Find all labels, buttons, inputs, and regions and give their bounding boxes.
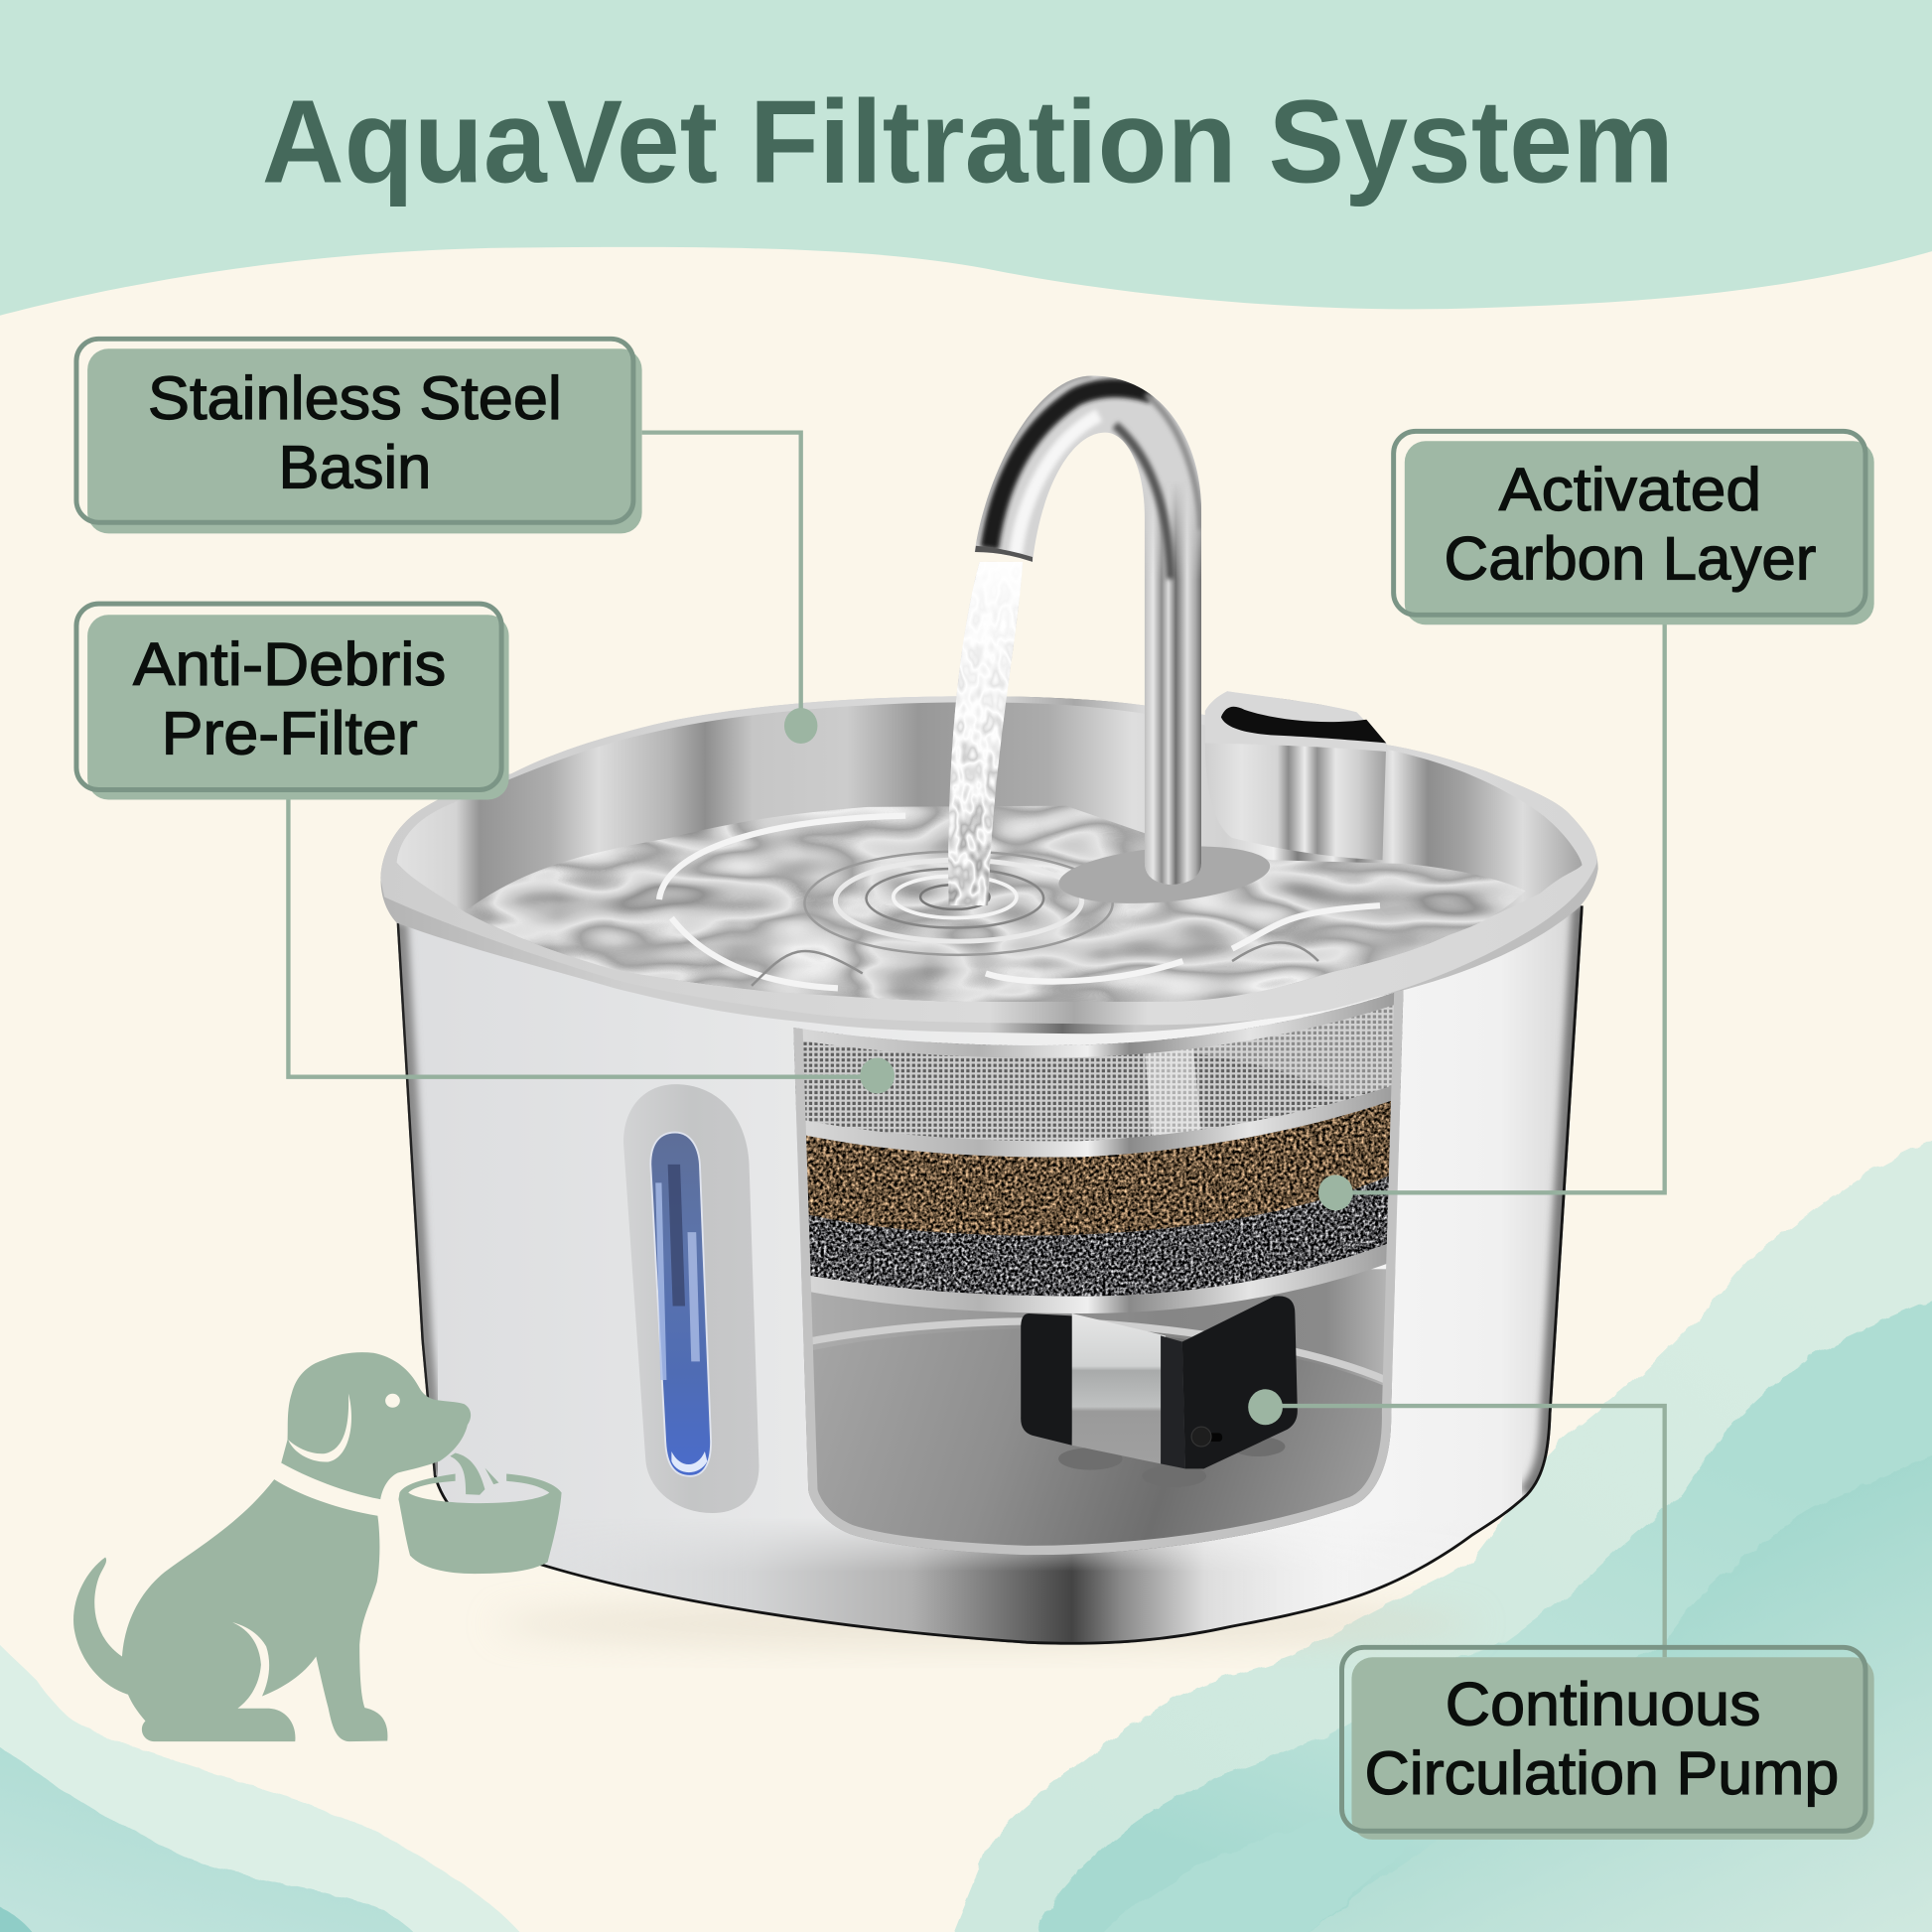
label: Continuous Circulation Pump: Continuous	[1446, 1671, 1760, 1738]
bottom-right watercolor wash	[949, 1134, 1932, 1932]
rim and top surface	[380, 696, 1598, 1034]
icon: dog drinking from bowl	[73, 1352, 562, 1741]
label: Continuous Circulation Pump: Circulation Pump	[1364, 1739, 1839, 1807]
label: Activated Carbon Layer	[1394, 431, 1874, 624]
pre-filter mesh layer	[788, 986, 1411, 1152]
water arc from mouth	[450, 1452, 484, 1495]
bowl	[398, 1473, 562, 1574]
cutaway window	[788, 986, 1411, 1578]
pump housing bump on back rim	[1205, 691, 1386, 860]
water level window	[623, 1084, 759, 1513]
label: Activated Carbon Layer: Activated	[1499, 456, 1761, 523]
lower metal divider ring	[807, 1242, 1392, 1313]
title: AquaVet Filtration System	[262, 76, 1674, 208]
leader line: carbon layer	[1318, 623, 1665, 1210]
water surface	[470, 806, 1525, 1002]
faucet disc base	[1056, 839, 1273, 911]
label: Activated Carbon Layer: Carbon Layer	[1445, 524, 1816, 592]
water droplet	[484, 1467, 498, 1484]
leader line: stainless steel basin	[642, 433, 817, 744]
submersible pump	[1021, 1296, 1298, 1487]
fountain body shell	[369, 905, 1601, 1663]
label: Stainless Steel Basin	[76, 339, 642, 533]
label: Anti-Debris Pre-Filter: Anti-Debris	[133, 630, 446, 698]
lower chamber	[801, 1269, 1396, 1553]
grey gravel granules	[808, 1175, 1389, 1297]
label: Anti-Debris Pre-Filter	[76, 604, 509, 799]
label: Continuous Circulation Pump	[1342, 1647, 1874, 1840]
window frame	[793, 990, 1404, 1555]
faucet spout	[973, 376, 1207, 894]
dog head	[281, 1352, 471, 1499]
bottom-left watercolor wash	[0, 1639, 532, 1932]
water stream	[948, 562, 1023, 905]
brown carbon granules	[806, 1100, 1391, 1236]
leader line: pump	[1248, 1389, 1665, 1657]
ripple rings	[659, 816, 1380, 988]
eye	[385, 1394, 400, 1408]
fountain illustration	[369, 376, 1601, 1663]
rim upper surface	[380, 696, 1597, 1025]
label: Anti-Debris Pre-Filter: Pre-Filter	[162, 700, 418, 767]
leader line: pre-filter	[288, 798, 895, 1093]
basin back wall	[397, 702, 1583, 1002]
ear outline	[288, 1393, 351, 1462]
label: Stainless Steel Basin: Stainless Steel	[148, 364, 562, 432]
header wave band	[0, 0, 1932, 316]
upper metal divider ring	[803, 1085, 1392, 1158]
dog body	[73, 1479, 387, 1741]
band under rim	[788, 988, 1407, 1057]
fountain: ground shadow	[492, 1601, 1478, 1646]
label: Stainless Steel Basin: Basin	[278, 433, 431, 500]
